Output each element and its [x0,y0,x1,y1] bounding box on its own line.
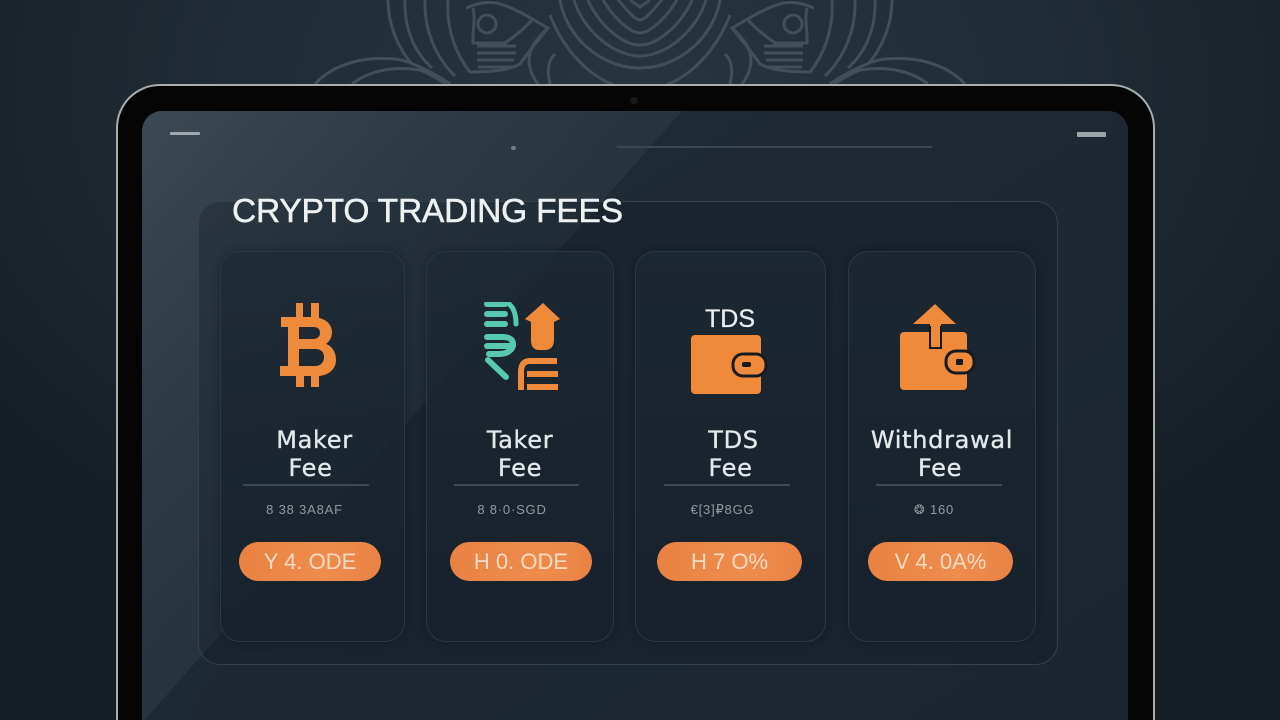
label: TDS [708,426,759,454]
pill value [450,542,592,581]
label [486,426,553,482]
pill value [868,542,1013,581]
pill value: Y 4. ODE [264,549,356,574]
pill value [239,542,381,581]
icon: wallet with arrow [900,304,976,390]
label: Maker [276,426,353,454]
top dot [511,146,516,150]
label: Fee [708,454,753,482]
icon: bitcoin [280,303,336,387]
pill value: V 4. 0A% [895,549,986,574]
left lobe [388,0,412,64]
card: withdrawal fee [848,251,1036,642]
card: taker fee [426,251,614,642]
label [276,426,353,482]
detail: 8 8·0·SGD [477,502,547,517]
divider [664,484,790,486]
detail: €[3]₽8GG [691,502,754,517]
centre rings [550,15,730,90]
label: Fee [918,454,962,482]
laptop frame [116,84,1155,720]
card: tds fee [635,251,826,642]
label: Taker [487,426,553,454]
title: CRYPTO TRADING FEES [232,193,623,230]
pill value: H 0. ODE [474,549,568,574]
status indicator right [1077,132,1106,137]
card: maker fee [220,251,405,642]
icon: tds wallet [691,305,768,394]
right lobe [868,0,892,64]
label [871,426,1013,482]
icon: rupee and stack [484,302,560,390]
label: Withdrawal [871,426,1013,454]
pill value: H 7 O% [691,549,768,574]
detail: 8 38 3A8AF [266,502,343,517]
detail: ❂ 160 [914,502,954,517]
divider [876,484,1002,486]
status text left [170,132,200,135]
label: Fee [288,454,333,482]
label [708,426,759,482]
camera [630,97,638,104]
divider [454,484,579,486]
top line [617,146,932,148]
mandala ornament [314,0,966,84]
main panel [198,201,1058,665]
screen [142,111,1128,720]
label: Fee [498,454,542,482]
pill value [657,542,802,581]
icon caption: TDS [705,305,755,333]
divider [243,484,369,486]
